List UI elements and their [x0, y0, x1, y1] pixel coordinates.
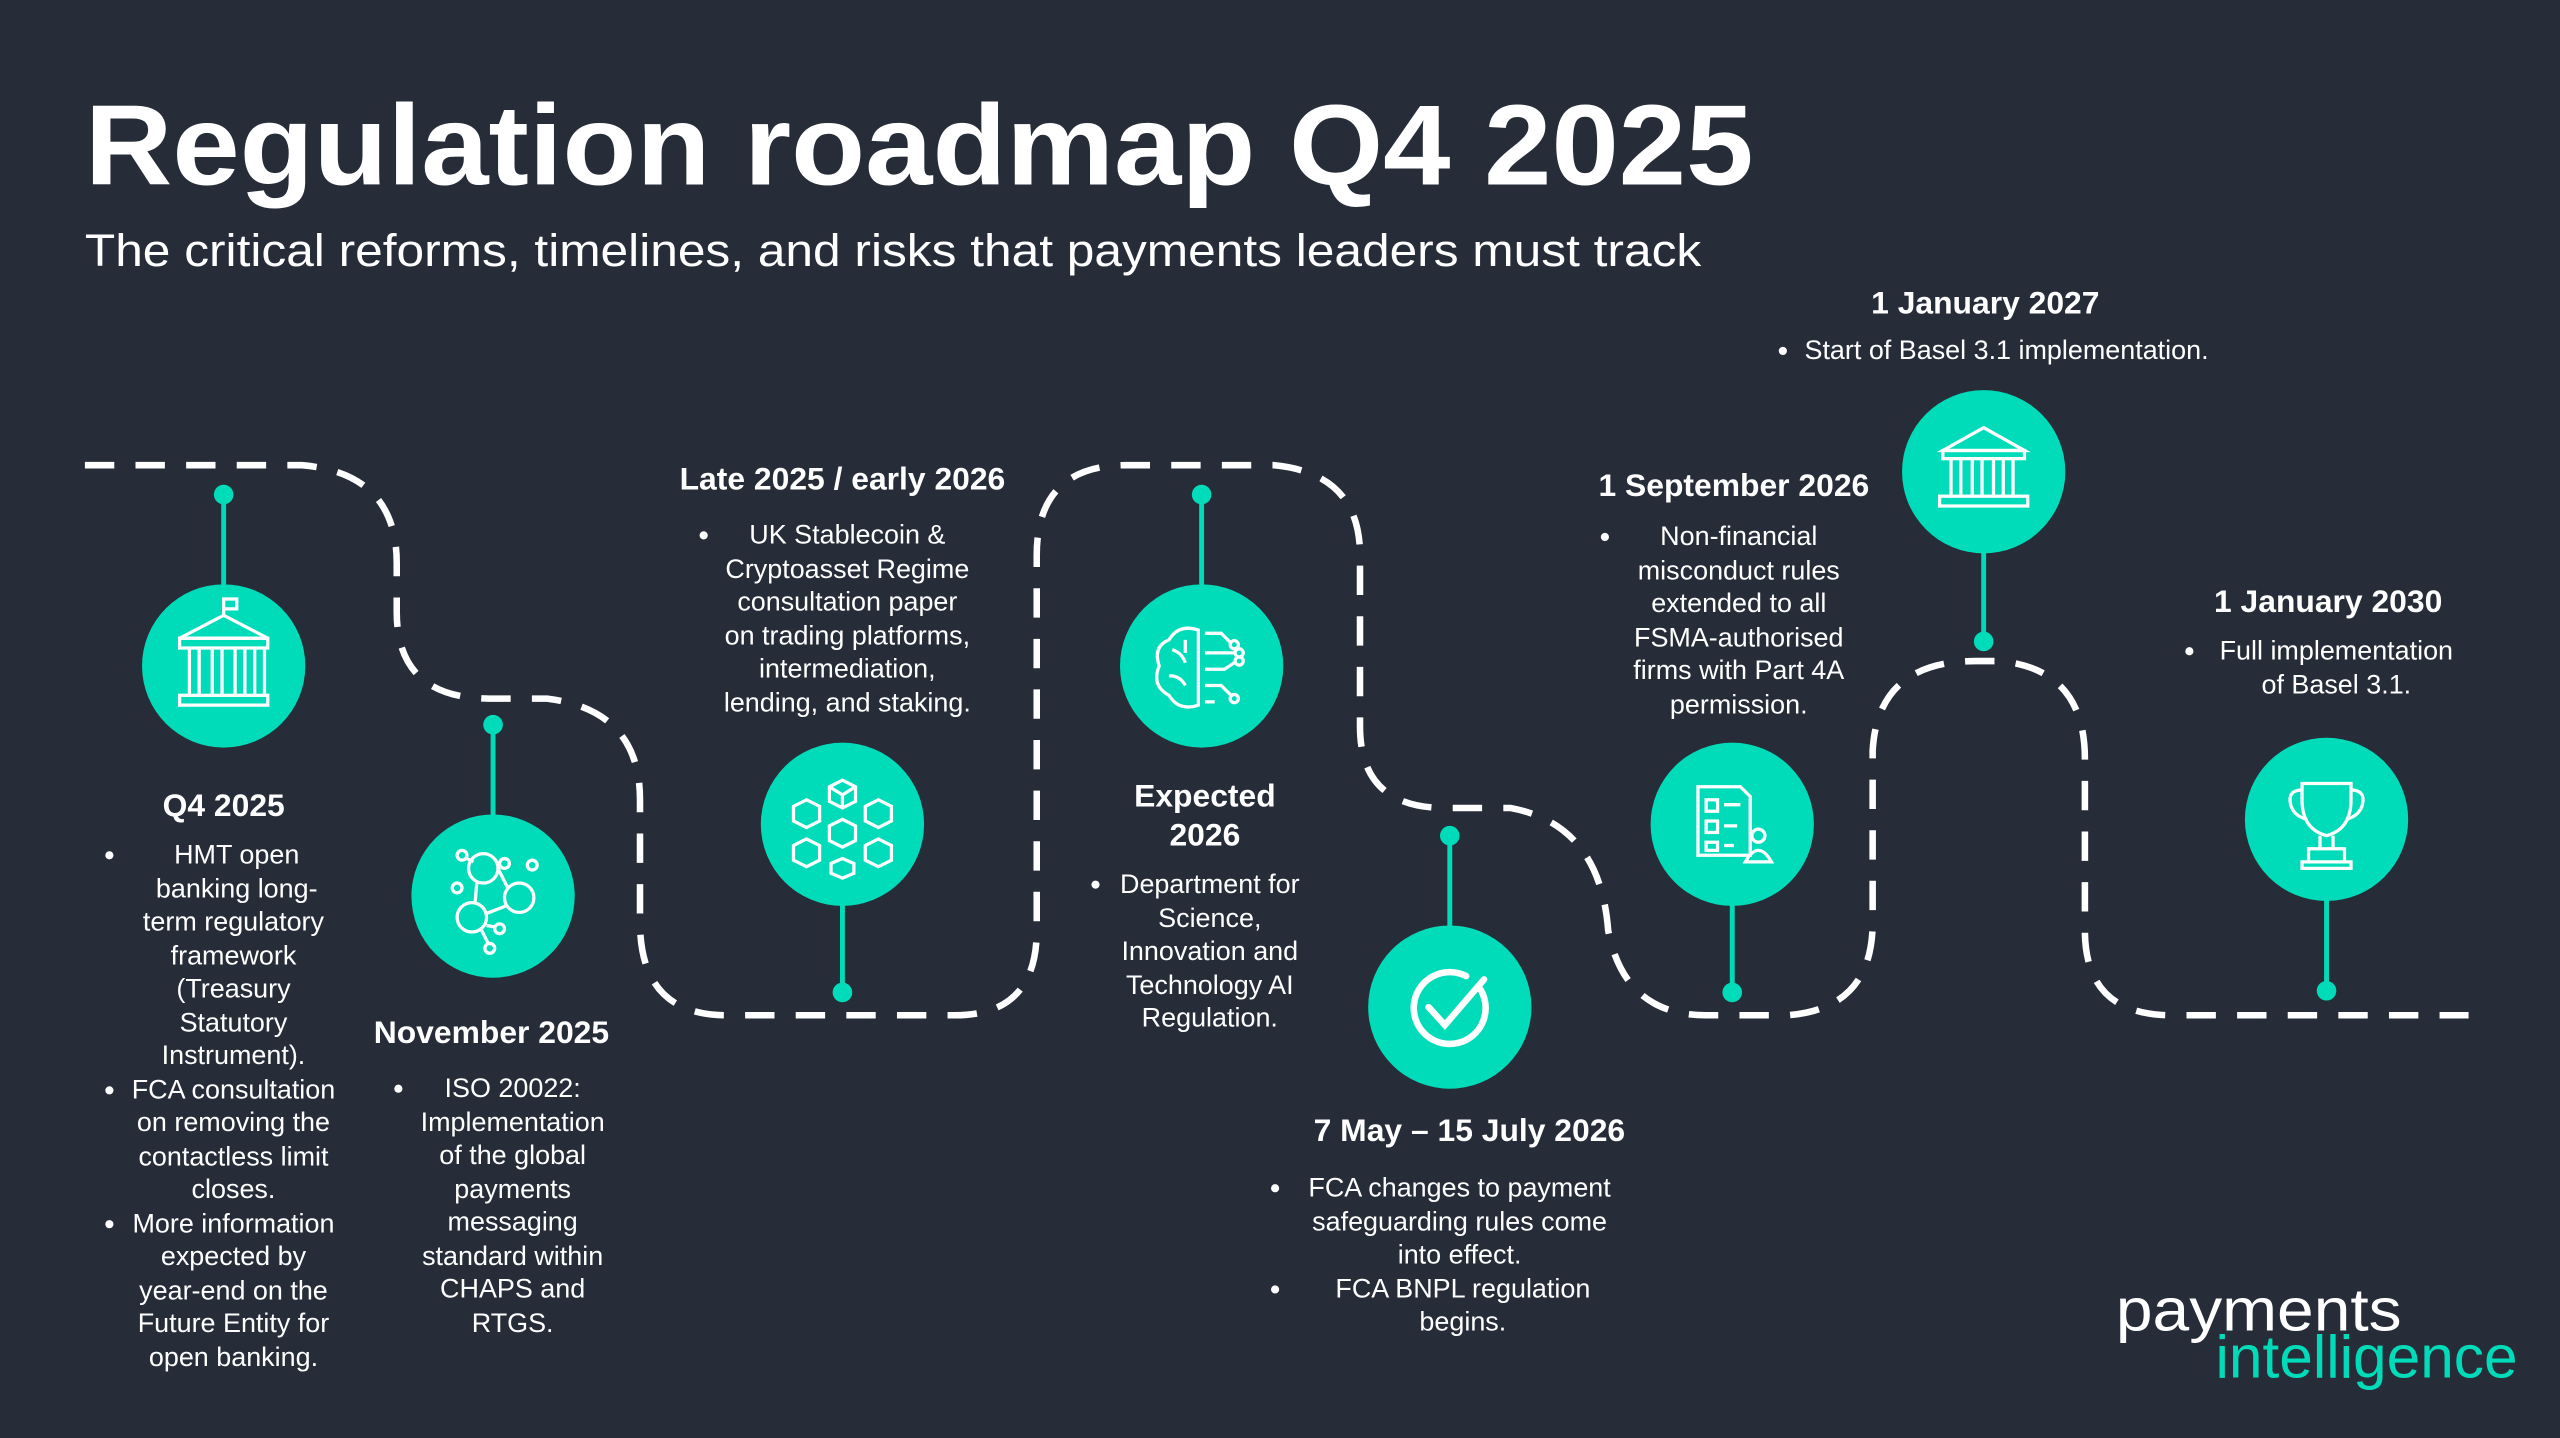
milestone: Late 2025 / early 2026: lending, and staking.	[724, 688, 971, 718]
milestone: Late 2025 / early 2026: on trading platforms,	[725, 621, 970, 651]
milestone: Q4 2025: Future Entity for	[138, 1308, 329, 1338]
milestone: Late 2025 / early 2026: intermediation,	[759, 653, 936, 683]
icon: check mark	[1414, 972, 1486, 1044]
milestone: 1 September 2026: misconduct rules	[1638, 555, 1840, 585]
milestone: Late 2025 / early 2026: Late 2025 / early 2026	[680, 461, 1005, 497]
milestone: Q4 2025: Q4 2025	[163, 787, 285, 823]
icon: government building	[180, 599, 268, 705]
milestone: November 2025: messaging	[448, 1207, 578, 1237]
dashed roadmap path	[85, 465, 2469, 1015]
logo: payments intelligence: intelligence	[2216, 1323, 2518, 1391]
milestone: 1 September 2026: Non-financial	[1660, 521, 1817, 551]
milestone: Expected 2026: Technology AI	[1126, 970, 1294, 1000]
icon: checklist document with person	[1698, 787, 1771, 862]
milestone: November 2025: RTGS.	[472, 1308, 554, 1338]
milestone: Q4 2025: banking long-	[156, 874, 318, 904]
icon: blockchain cubes	[793, 780, 891, 878]
milestone: 1 September 2026: FSMA-authorised	[1634, 622, 1844, 652]
milestone: November 2025: ISO 20022:	[445, 1073, 581, 1103]
milestone: 1 September 2026: 1 September 2026	[1599, 467, 1869, 503]
milestone: 7 May – 15 July 2026: FCA BNPL regulation	[1335, 1274, 1590, 1304]
milestone: November 2025: Implementation	[421, 1107, 605, 1137]
milestone: Late 2025 / early 2026	[680, 461, 1005, 1002]
milestone: 1 January 2030	[2185, 583, 2453, 1001]
milestone: Q4 2025: Statutory	[180, 1008, 288, 1038]
milestone: Q4 2025: open banking.	[149, 1342, 318, 1372]
milestone: Q4 2025: term regulatory	[143, 906, 325, 936]
milestone: 7 May – 15 July 2026: FCA changes to payment	[1308, 1172, 1611, 1202]
milestone: 7 May – 15 July 2026	[1271, 826, 1625, 1336]
milestone: 1 January 2030: 1 January 2030	[2214, 583, 2442, 619]
milestone: Q4 2025: contactless limit	[138, 1141, 329, 1171]
milestone: 7 May – 15 July 2026: begins.	[1419, 1306, 1506, 1336]
milestone: 1 September 2026: extended to all	[1651, 588, 1826, 618]
milestone: November 2025: payments	[454, 1174, 571, 1204]
milestone: Q4 2025: FCA consultation	[132, 1074, 335, 1104]
milestone: Q4 2025: closes.	[192, 1174, 275, 1204]
milestone: Q4 2025	[105, 485, 335, 1372]
milestone: November 2025: November 2025	[374, 1014, 609, 1050]
milestone: November 2025: standard within	[422, 1241, 603, 1271]
milestone: 7 May – 15 July 2026: 7 May – 15 July 2026	[1314, 1112, 1625, 1148]
milestone: Late 2025 / early 2026: consultation paper	[737, 586, 957, 616]
icon: AI brain	[1157, 628, 1243, 707]
milestone: November 2025: of the global	[439, 1140, 586, 1170]
milestone: 1 September 2026: firms with Part 4A	[1633, 655, 1844, 685]
milestone: 1 September 2026	[1599, 467, 1869, 1002]
logo: payments intelligence: payments	[2116, 1275, 2402, 1343]
milestone: Late 2025 / early 2026: Cryptoasset Regime	[725, 554, 969, 584]
milestone: Expected 2026: Science,	[1158, 903, 1261, 933]
milestone: Late 2025 / early 2026: UK Stablecoin &	[749, 520, 945, 550]
milestone: 1 January 2030: of Basel 3.1.	[2261, 670, 2411, 700]
milestone: November 2025: CHAPS and	[440, 1274, 585, 1304]
milestone: Q4 2025: HMT open	[174, 839, 299, 869]
milestone: Q4 2025: year-end on the	[139, 1275, 328, 1305]
milestone: Expected 2026: Expected	[1134, 777, 1276, 813]
milestone: November 2025	[374, 715, 609, 1338]
milestone: 1 January 2027: Start of Basel 3.1 implementation.	[1804, 335, 2209, 365]
milestone: Expected 2026	[1091, 485, 1300, 1033]
title: Regulation roadmap Q4 2025	[85, 82, 1753, 209]
icon: network of people	[452, 850, 537, 953]
milestone: 7 May – 15 July 2026: into effect.	[1398, 1239, 1521, 1269]
milestone: Expected 2026: 2026	[1169, 817, 1240, 852]
icon: bank	[1940, 428, 2028, 506]
milestone: Q4 2025: framework	[171, 941, 297, 971]
milestone: 1 January 2027: 1 January 2027	[1871, 284, 2099, 320]
milestone: Q4 2025: (Treasury	[176, 973, 291, 1003]
milestone: Q4 2025: on removing the	[137, 1107, 330, 1137]
milestone: Q4 2025: Instrument).	[162, 1040, 305, 1070]
milestone: Q4 2025: More information	[132, 1208, 334, 1238]
milestone: 7 May – 15 July 2026: safeguarding rules come	[1312, 1207, 1607, 1237]
subtitle: The critical reforms, timelines, and risks that payments leaders must track	[85, 225, 1701, 276]
milestone: 1 January 2027	[1779, 284, 2209, 651]
logo: payments intelligence	[2116, 1275, 2518, 1391]
icon: trophy	[2290, 783, 2363, 868]
milestone: Expected 2026: Innovation and	[1121, 936, 1298, 966]
milestone: 1 September 2026: permission.	[1670, 689, 1808, 719]
milestone: 1 January 2030: Full implementation	[2220, 635, 2453, 665]
milestone: Expected 2026: Regulation.	[1142, 1003, 1278, 1033]
milestone: Q4 2025: expected by	[161, 1241, 307, 1271]
milestone: Expected 2026: Department for	[1120, 869, 1300, 899]
